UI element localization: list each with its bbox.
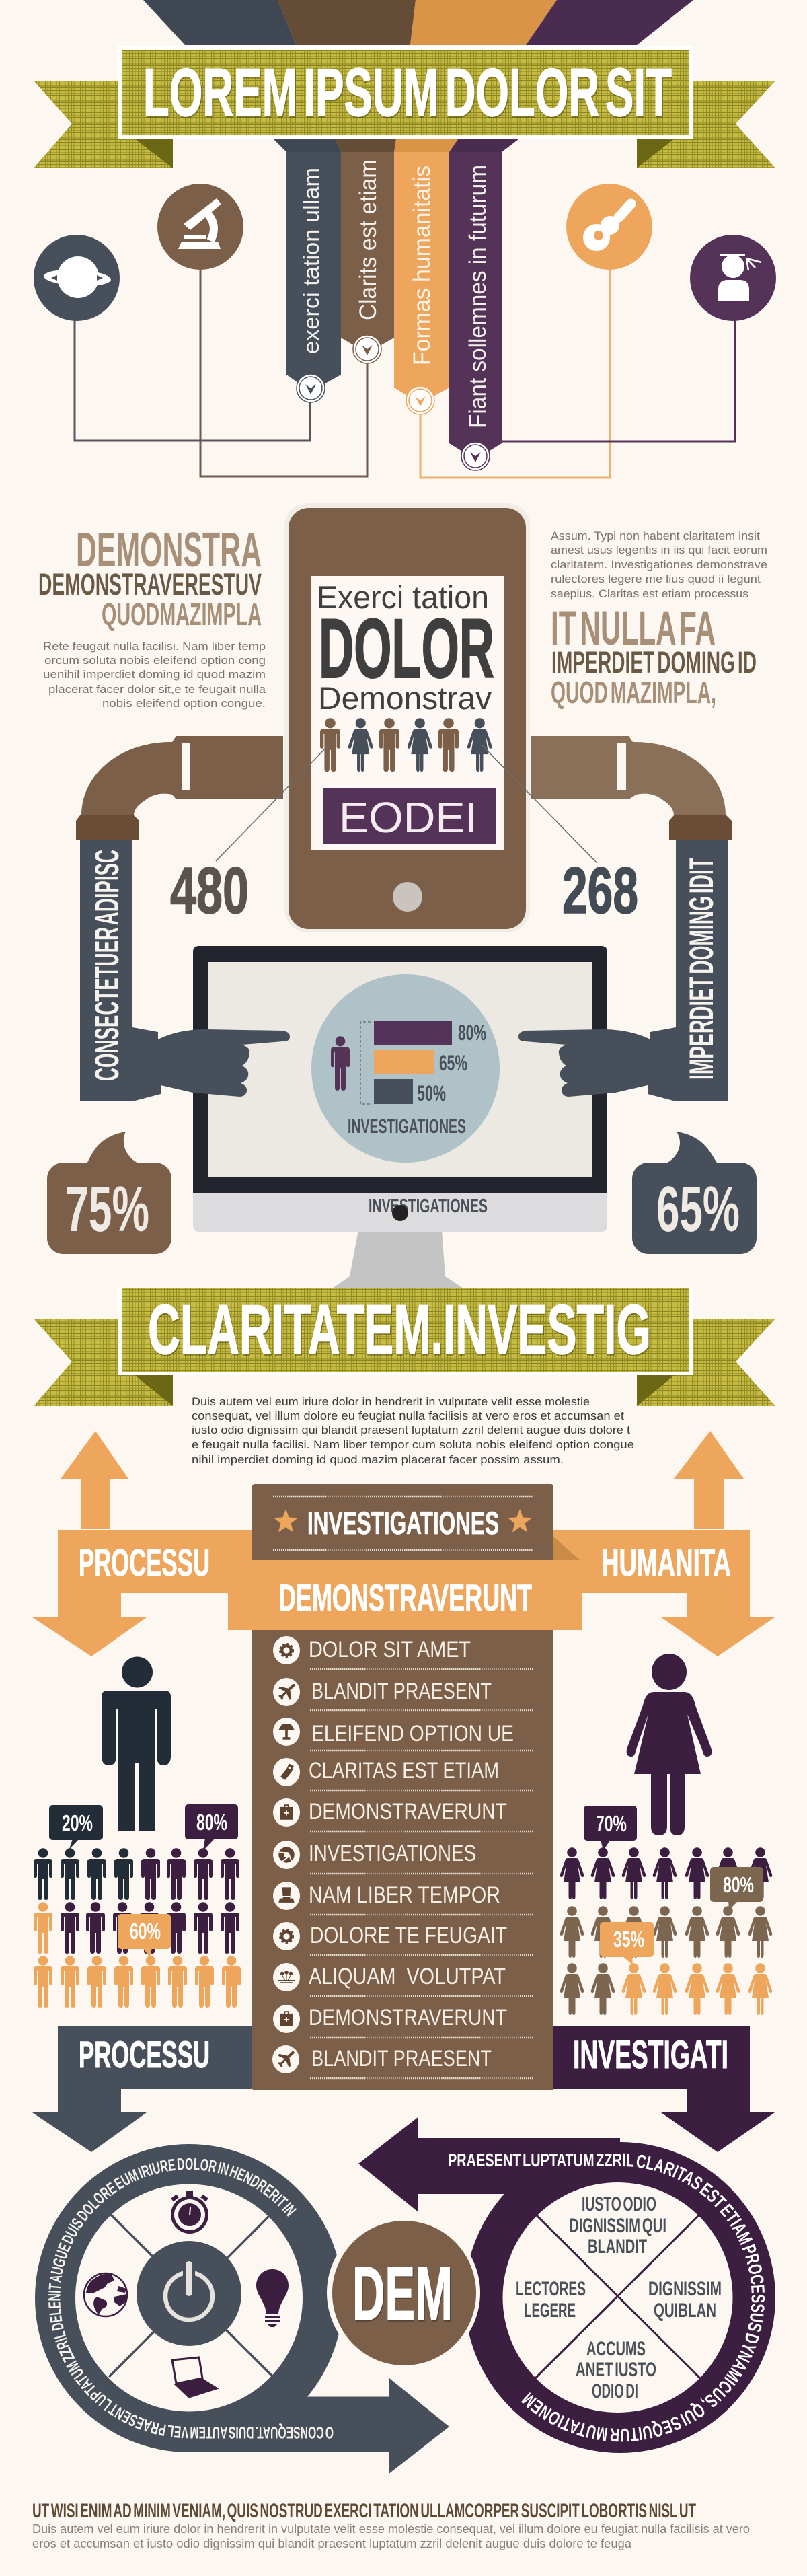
pie labels: DIGNISSIM QUI [569,2215,666,2237]
right paragraph: Assum. Typi non habent claritatem insit [551,529,760,542]
right heading block [551,602,757,710]
left cycle ring [35,2144,449,2473]
list labels: BLANDIT PRAESENT [311,2046,492,2071]
up arrow left [61,1431,128,1529]
left heading block [38,523,262,632]
men pictogram grid [34,1848,241,2008]
list labels: INVESTIGATIONES [309,1841,476,1866]
connector lines [75,270,735,478]
left paragraph: nobis eleifend option congue. [102,697,266,710]
list labels: NAM LIBER TEMPOR [309,1882,500,1908]
callout 80% brown [710,1867,763,1910]
icon: laptop [172,2357,217,2397]
bar chart in circle: 50% [417,1081,446,1105]
list labels [309,1637,514,2071]
icon: microscope [157,184,243,270]
right paragraph: claritatem. Investigationes demonstrave [551,558,767,571]
icon: graduate [690,235,776,321]
right pointing hand [518,1027,676,1101]
slate down arrow: PROCESSU [79,2033,210,2075]
monitor label: INVESTIGATIONES [369,1195,488,1217]
pie labels [516,2193,722,2402]
right paragraph: saepius. Claritas est etiam processus [551,587,748,600]
callout 60%: 60% [130,1919,161,1944]
funnel under banner [274,139,518,152]
callout 70% [584,1806,637,1851]
orange cross ribbon [32,1530,775,1656]
callout 80% purple: 80% [196,1810,227,1835]
footer paragraph: eros et accumsan et iusto odio dignissim qui blandit praesent luptatum zzril delenit augue duis dolore te feuga [32,2537,632,2550]
vertical ribbon: exerci tation ullam [286,152,341,402]
pie labels: DIGNISSIM [648,2278,722,2300]
slate down arrow [32,2026,252,2152]
vertical ribbon: Clarits est etiam: Clarits est etiam [355,159,381,320]
list labels: BLANDIT PRAESENT [311,1679,492,1704]
bar chart in circle: 80% [458,1021,486,1045]
big woman figure [627,1654,712,1835]
callout 60% [118,1914,171,1958]
phone [284,503,530,932]
phone: DOLOR [319,602,494,696]
left pointing hand [132,1027,290,1101]
list labels: DEMONSTRAVERUNT [309,1799,507,1825]
list labels: CLARITAS EST ETIAM [309,1758,499,1783]
power hub [137,2241,241,2346]
pie labels: LEGERE [524,2299,576,2322]
pipe label: IMPERDIET DOMING IDIT [683,858,720,1080]
speech bubble 75% [47,1132,171,1254]
intro paragraph: nihil imperdiet doming id quod mazim placerat facer possim assum. [192,1453,564,1466]
DEM centre circle: DEM [352,2251,453,2336]
ribbon label: humanita: HUMANITA [601,1541,731,1584]
footer paragraph: Duis autem vel eum iriure dolor in hendrerit in vulputate velit esse molestie consequat, vel illum dolore eu feugiat nulla facilisis at vero [32,2522,750,2536]
left paragraph: orcum soluta nobis eleifend option cong [44,654,266,667]
ribbon label: demonstraverunt: DEMONSTRAVERUNT [278,1576,532,1619]
pie labels: QUIBLAN [654,2299,716,2322]
right paragraph [551,529,767,600]
list labels: ELEIFEND OPTION UE [311,1721,514,1746]
right cycle ring [358,2117,775,2453]
pie labels: LECTORES [516,2278,586,2300]
brown header panel [252,1484,553,1560]
EODEI box [323,788,496,844]
pie labels: BLANDIT [588,2236,647,2258]
stat 268: 268 [562,854,638,927]
list labels: DOLORE TE FEUGAIT [310,1923,507,1948]
vertical ribbon: exerci tation ullam: exerci tation ullam [299,168,323,354]
pie labels: ANET IUSTO [576,2359,656,2381]
intro paragraph: Duis autem vel eum iriure dolor in hendrerit in vulputate velit esse molestie [192,1395,590,1408]
callout 70%: 70% [596,1811,627,1836]
callout 80% purple [185,1804,238,1851]
callout 35%: 35% [613,1927,644,1952]
icon: stopwatch [171,2191,208,2234]
pie labels: ACCUMS [586,2338,646,2360]
icon: light bulb [256,2269,289,2327]
footer paragraph [32,2522,750,2550]
phone: EODEI [339,793,477,842]
right paragraph: amest usus legentis in iis qui facit eorum [551,544,767,556]
icon: planet [34,235,120,321]
ribbon label: processu: PROCESSU [79,1541,210,1584]
vertical ribbon: Fiant sollemnes in futurum: Fiant sollemnes in futurum [465,165,491,428]
speech bubble 65%: 65% [656,1173,740,1245]
women pictogram grid [560,1847,772,2015]
bar chart in circle: INVESTIGATIONES [348,1116,466,1138]
vertical ribbon: Formas humanitatis [394,152,449,414]
left heading block: DEMONSTRAVERESTUV [38,567,262,601]
stat 480: 480 [170,854,249,927]
brown header panel: INVESTIGATIONES [307,1505,499,1541]
callout 35% [600,1922,654,1965]
vertical ribbon: Formas humanitatis: Formas humanitatis [409,165,435,365]
phone headline: Exerci tation [317,579,489,615]
intro paragraph: iusto odio dignissim qui blandit praesent luptatum zzril delenit augue duis dolore t [192,1424,630,1436]
monitor [193,946,607,1289]
right paragraph: rulectores legere me lius quod ii legunt [551,573,761,585]
curved text left: O CONSEQUAT. DUIS AUTEM VEL PRAESENT LUPTATUM ZZRIL DELENIT AUGUE DUIS DOLORE EUM IRIURE DOLOR IN HENDRERIT IN [48,2158,334,2439]
leader lines [216,743,597,863]
icon: globe [84,2273,127,2316]
right pipe [531,736,732,1101]
pie labels: IUSTO ODIO [582,2193,656,2215]
icon: guitar [566,184,652,270]
phone people row [320,718,492,772]
DEM centre circle [327,2216,480,2369]
top funnel bands [143,0,693,45]
left paragraph: uenihil imperdiet doming id quod mazim [43,668,266,681]
list labels: DEMONSTRAVERUNT [309,2005,507,2030]
bar chart in circle [311,974,500,1163]
list labels: ALIQUAM VOLUTPAT [309,1964,506,1989]
phone: Demonstrav [318,680,492,716]
intro paragraph [192,1395,634,1466]
vertical ribbon: Clarits est etiam [341,152,394,363]
bar chart in circle: 65% [439,1051,467,1075]
left pipe [76,736,283,1101]
curved text right: PRAESENT LUPTATUM ZZRIL CLARITAS EST ETIAM PROCESSUS DYNAMICUS, QUI SEQUITUR MUTATIONEM [449,2153,765,2442]
left paragraph [43,640,266,710]
left paragraph: Rete feugait nulla facilisi. Nam liber temp [43,640,266,653]
callout 20% [49,1805,103,1849]
left heading block: DEMONSTRA [76,523,262,577]
second banner [34,1288,775,1406]
left paragraph: placerat facer dolor sit,e te feugait nulla [48,683,266,696]
list labels: DOLOR SIT AMET [309,1637,471,1662]
brown list panel [252,1630,553,2090]
callout 20%: 20% [62,1810,93,1835]
title banner [34,46,775,168]
pipe label: CONSECTETUER ADIPISC [88,850,126,1081]
speech bubble 75%: 75% [65,1173,149,1245]
intro paragraph: e feugait nulla facilisi. Nam liber tempor cum soluta nobis eleifend option congue [192,1438,634,1451]
intro paragraph: consequat, vel illum dolore eu feugiat nulla facilisis at vero eros et accumsan et [192,1409,624,1422]
callout 80% brown: 80% [723,1872,754,1897]
left heading block: QUODMAZIMPLA [102,597,262,632]
speech bubble 65% [632,1132,757,1254]
purple down arrow [553,2026,775,2152]
vertical ribbon: Fiant sollemnes in futurum [449,152,502,470]
big man figure [102,1656,171,1831]
up arrow right [674,1431,744,1529]
pie labels: ODIO DI [592,2380,638,2402]
